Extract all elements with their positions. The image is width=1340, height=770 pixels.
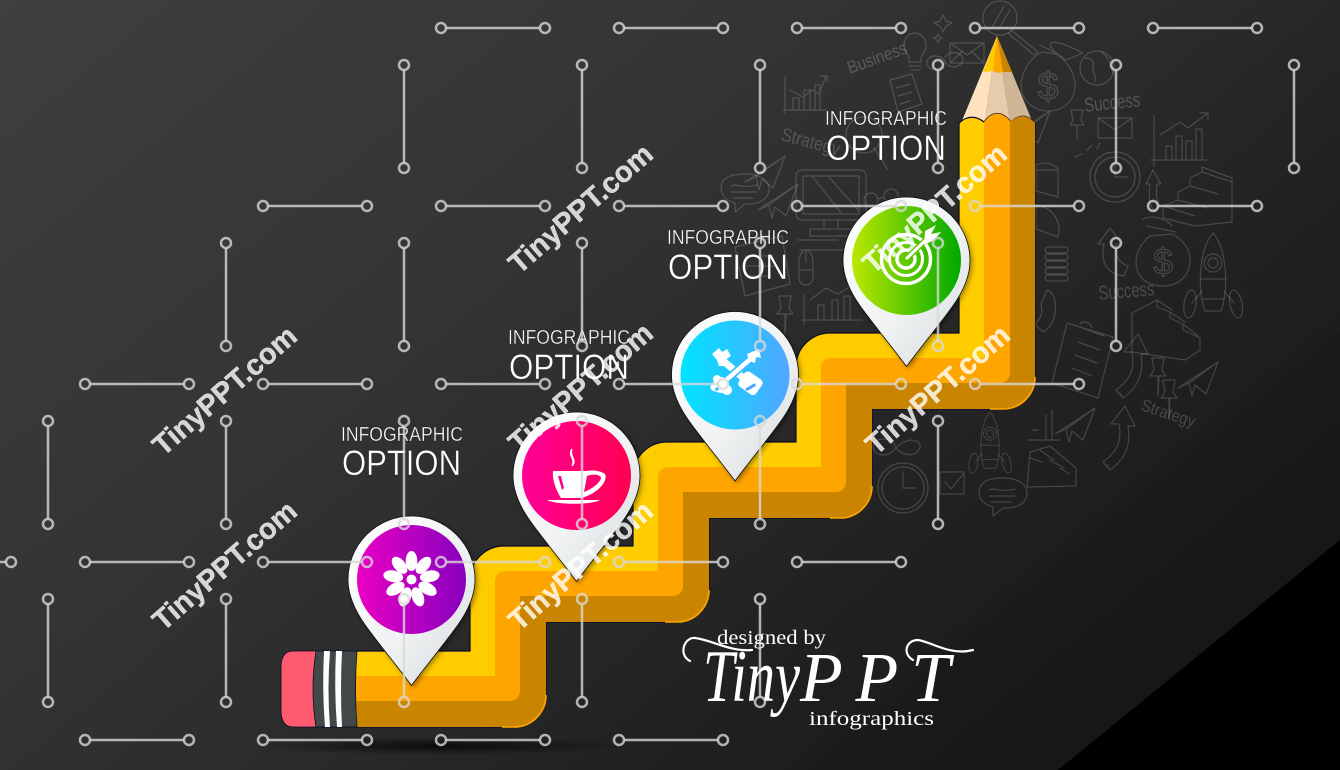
pin 2: coffee cup: [513, 412, 640, 582]
business doodles background: $: [1037, 66, 1059, 108]
watermarks: TinyPPT.com: [503, 495, 660, 637]
text: option 2: [508, 327, 630, 387]
business doodles background: Strategy: [779, 125, 843, 160]
icon: coffee cup: [547, 449, 606, 504]
text: option 2: OPTION: [509, 348, 629, 387]
watermarks: TinyPPT.com: [860, 319, 1017, 461]
watermarks: [147, 138, 1017, 637]
text: option 3: INFOGRAPHIC: [667, 227, 789, 249]
text: option 3: [667, 227, 789, 287]
text: option 1: [341, 424, 463, 483]
pencil wood tip: [959, 36, 1035, 128]
script wordmark: Tiny: [703, 636, 800, 718]
pencil: [281, 36, 1035, 727]
text: option 1: OPTION: [342, 444, 461, 483]
designed by text: designed by: [717, 627, 826, 649]
business doodles background: $: [1153, 241, 1173, 282]
icon: crossed keys: [710, 348, 764, 397]
watermarks: TinyPPT.com: [503, 138, 660, 280]
pencil ferrule: [313, 651, 357, 727]
pin 3: crossed keys: [672, 312, 798, 481]
business doodles background: Strategy: [1139, 396, 1198, 431]
icon: flower: [382, 551, 441, 608]
pencil eraser: [281, 651, 316, 727]
text: option 1: INFOGRAPHIC: [341, 424, 463, 446]
shadow under pencil: [250, 737, 630, 755]
text: option 4: INFOGRAPHIC: [825, 108, 947, 130]
brand signature: [683, 627, 973, 730]
script wordmark PPT: PPT: [799, 640, 955, 717]
text: option 2: INFOGRAPHIC: [508, 327, 630, 349]
business doodles background: Success: [1083, 89, 1141, 117]
pin 1: flower: [348, 516, 475, 686]
business doodles background: Success: [1098, 278, 1155, 305]
text: option 3: OPTION: [668, 248, 788, 287]
business doodles background: Business: [845, 38, 910, 78]
infographics text: infographics: [809, 708, 934, 730]
text: option 4: OPTION: [826, 129, 946, 168]
watermarks: TinyPPT.com: [857, 138, 1014, 280]
pencil lead point: [983, 36, 1012, 73]
watermarks: TinyPPT.com: [147, 320, 304, 462]
icon: target with arrow: [882, 225, 941, 284]
wordmark swashes: [683, 638, 973, 661]
text: option 4: [825, 108, 947, 168]
watermarks: TinyPPT.com: [147, 495, 304, 637]
business doodles background: [721, 1, 1245, 516]
pin 4: target: [843, 197, 970, 366]
pencil stair body: [355, 114, 1035, 727]
watermarks: TinyPPT.com: [503, 317, 660, 459]
